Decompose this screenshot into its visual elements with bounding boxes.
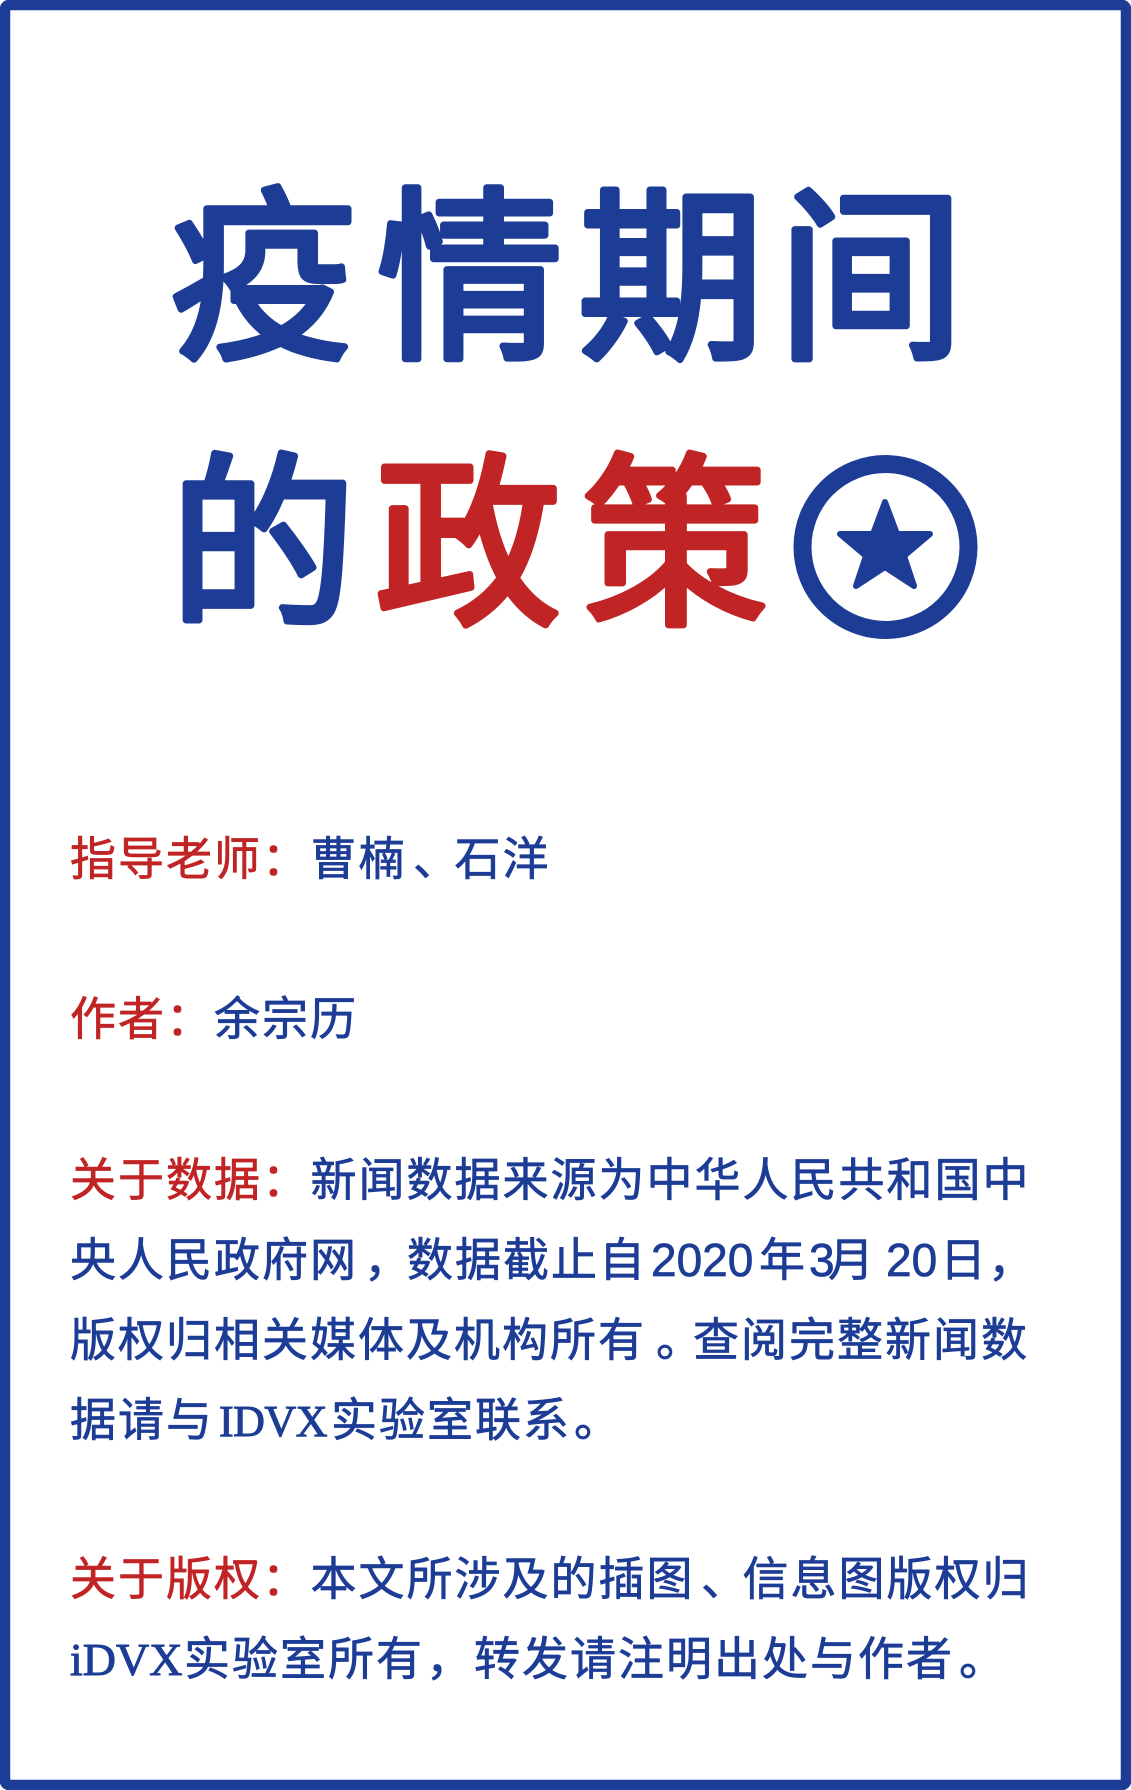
text block: about copyright: 转发请注明出处与作者 [474, 1634, 954, 1685]
text block: about data: 年 [759, 1235, 807, 1286]
credit: advisors: 石洋 [454, 834, 550, 885]
title line 2 [170, 443, 768, 650]
credit: advisors: 指导老师： [70, 834, 310, 885]
text block: about data: 20 [886, 1234, 937, 1286]
credit: advisors: 曹楠 [310, 834, 406, 885]
text block: about data: 央人民政府网 [70, 1235, 358, 1286]
title [170, 177, 964, 650]
text block: about data: 3 [809, 1234, 835, 1286]
title line 1: 疫 [170, 177, 356, 384]
text block: about data: 实验室联系 [331, 1395, 571, 1446]
text block: about data: 。 [656, 1315, 704, 1366]
title line 1: 情 [377, 177, 563, 384]
credit: author: 作者： [70, 994, 214, 1045]
credit: author: 余宗历 [214, 994, 358, 1045]
text block: about data: 月 [828, 1235, 876, 1286]
text block: about copyright: iDVX [70, 1634, 182, 1685]
text block: about data: 查阅完整新闻数 [693, 1315, 1029, 1366]
text block: about copyright: 实验室所有 [184, 1634, 424, 1685]
text block: about data: 2020 [651, 1234, 753, 1286]
text block: about copyright: 关于版权： [70, 1554, 310, 1605]
text block: about data: 版权归相关媒体及机构所有 [70, 1315, 646, 1366]
text block: about copyright: ， [426, 1634, 474, 1685]
title line 1 [170, 177, 964, 384]
text block: about data: ， [364, 1235, 412, 1286]
title line 1: 期 [578, 177, 764, 384]
title line 2: 策 [582, 443, 768, 650]
text block: about copyright [70, 1554, 1030, 1685]
text block: about data: 数据截止自 [407, 1235, 647, 1286]
text block: about data [70, 1155, 1036, 1446]
text block: about copyright: 、 [701, 1554, 749, 1605]
title line 2: 政 [375, 443, 561, 650]
text block: about data: 新闻数据来源为中华人民共和国中 [310, 1155, 1030, 1206]
text block: about copyright: 信息图版权归 [742, 1554, 1030, 1605]
title line 1: 间 [778, 177, 964, 384]
text block: about data: 日 [940, 1235, 988, 1286]
title line 2: 的 [170, 443, 356, 650]
text block: about data: IDVX [219, 1397, 327, 1446]
text block: about data: 据请与 [70, 1395, 214, 1446]
text block: about copyright: 本文所涉及的插图 [310, 1554, 694, 1605]
text block: about copyright: 。 [959, 1634, 1007, 1685]
text block: about data: 。 [574, 1395, 622, 1446]
text block: about data: ， [988, 1235, 1036, 1286]
icon: star in circle [802, 464, 968, 630]
text block: about data: 关于数据： [70, 1155, 310, 1206]
credit: advisors: 、 [413, 834, 461, 885]
